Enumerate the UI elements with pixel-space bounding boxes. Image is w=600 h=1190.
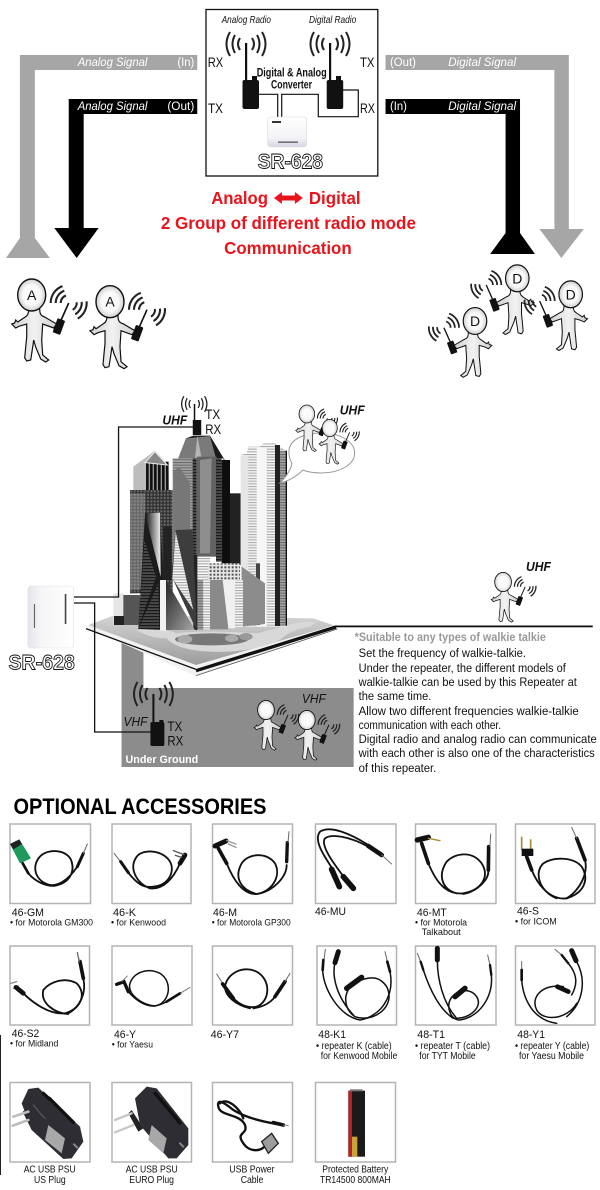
figure: UHF user on ground: UHF [526,559,552,574]
label: digital and analog converter [257,66,327,92]
labels: row 2 accessories: 48-T1 [417,1029,445,1041]
group: analog radio users: A [105,294,115,310]
labels: row 1 accessories: 46-S [517,906,539,918]
labels: row 2 accessories: • repeater K (cable) [316,1041,392,1052]
labels: row 1 accessories: 46-MU [315,906,346,918]
wires between radios and device [259,90,358,117]
label: right RX: RX [360,101,375,116]
labels: row 3 accessories: Protected Battery [322,1164,389,1176]
heading: optional accessories: OPTIONAL ACCESSORIES [14,794,266,819]
cable: 48-T1 [417,948,492,1020]
labels: row 2 accessories: • for Yaesu [112,1040,153,1050]
labels: row 2 accessories: • repeater Y (cable) [515,1041,589,1052]
arrow: gray digital signal out: (Out) [390,55,416,69]
cable: 46-Y7 [217,969,290,1008]
group: analog radio users [12,279,165,369]
heading: red communication statement: 2 Group of different radio mode [161,213,416,233]
label: digital radio: Digital Radio [309,14,356,26]
accessories row 3, adapters and battery [13,1087,365,1159]
text: feature description: walkie-talkie can be used by this Repeater at [358,675,577,689]
labels: row 3 accessories: EURO Plug [129,1174,174,1186]
labels: row 3 accessories: US Plug [34,1174,66,1186]
label: underground VHF TX RX: RX [167,733,183,749]
icon: AC USB PSU EURO plug [115,1087,188,1158]
labels: row 1 accessories: • for Motorola GP300 [212,917,291,928]
arrow: black analog signal out [54,99,197,258]
labels: row 1 accessories: 46-GM [12,907,44,919]
icon: USB power cable [218,1101,288,1153]
text: feature description: Allow two different frequencies walkie-talkie [359,704,579,718]
cable: 46-S [522,827,586,899]
arrow: gray analog signal in: (In) [177,55,194,69]
cable: 46-S2 [11,953,84,1014]
labels: row 3 accessories: USB Power [229,1164,275,1176]
labels: row 1 accessories: • for Motorola GM300 [10,917,93,928]
labels: row 1 accessories: • for Kenwood [111,917,166,928]
label: rooftop UHF TX RX [162,407,221,437]
label: SR-628: SR-628 [258,150,323,174]
text: feature description: of this repeater. [359,761,436,775]
arrow: black digital signal in: Digital Signal [448,99,516,113]
cable: 46-M [215,832,289,894]
labels: row 1 accessories: 46-MT [417,907,447,919]
icon: protected battery [348,1089,365,1157]
label: right TX: TX [360,55,374,70]
figures: underground VHF users: VHF [302,692,327,706]
labels: row 1 accessories: Talkabout [422,927,461,938]
labels: row 3 accessories: TR14500 800MAH [320,1174,391,1186]
cable: 46-MU [318,829,392,888]
labels: row 2 accessories: 46-Y [114,1029,137,1041]
icon: analog radio walkie-talkie [226,32,266,109]
icon: AC USB PSU US plug [13,1088,83,1159]
arrow: gray digital signal out [386,55,584,258]
label: digital and analog converter: Converter [271,78,312,92]
icon: digital radio walkie-talkie [310,32,350,109]
group: analog radio users: A [27,287,37,303]
text: feature description: communication with each other. [359,718,501,732]
labels: row 3 accessories: Cable [241,1174,264,1186]
labels: row 1 accessories: 46-K [113,907,137,919]
text: feature description: Under the repeater, the different models of [359,661,566,675]
labels: row 2 accessories [10,1028,589,1062]
heading: red communication statement: Digital [309,188,361,208]
label: SR-628 device name: SR-628 [8,651,75,675]
cable: 48-K1 [323,949,391,1020]
group: digital radio users: D [470,313,480,329]
callout: UHF users speech bubble [280,402,366,483]
cable: 46-GM [10,839,87,886]
text: feature description: *Suitable to any types of walkie talkie [355,630,546,644]
label: analog radio: Analog Radio [221,14,271,26]
cards: accessory frames [10,824,595,1162]
cable: 46-K [114,851,185,888]
arrow: gray digital signal out: Digital Signal [448,55,516,69]
panel: converter box [206,10,378,176]
labels: row 1 accessories [10,906,557,938]
labels: row 2 accessories: • for Midland [10,1038,58,1049]
labels: row 2 accessories: for Yaesu Mobile [519,1051,584,1062]
arrow: black digital signal in: (In) [390,99,407,113]
labels: row 2 accessories: 48-Y1 [517,1029,545,1041]
arrow: black analog signal out: Analog Signal [77,99,148,113]
text: feature description: the same time. [359,689,431,703]
heading: red communication statement: Analog [211,188,268,208]
wires from repeater to radios [74,427,193,732]
accessories row 2, left cables [11,953,290,1014]
label: rooftop UHF TX RX: UHF [162,412,188,428]
label: underground VHF TX RX: VHF [124,715,149,729]
cable: 46-MT [417,834,491,894]
labels: row 2 accessories: • repeater T (cable) [415,1041,490,1052]
group: digital radio users: D [566,286,576,302]
label: underground VHF TX RX [124,715,183,749]
labels: row 1 accessories: 46-M [213,907,237,919]
label: rooftop UHF TX RX: TX [205,407,220,422]
panel: underground area [122,640,354,767]
line: ground surface [335,626,593,627]
label: rooftop UHF TX RX: RX [205,422,221,437]
labels: row 1 accessories: • for ICOM [515,916,557,927]
accessories row 2, right cables [323,948,582,1023]
arrow: black digital signal in [386,99,535,254]
label: underground VHF TX RX: TX [167,719,182,734]
arrow: gray analog signal in [6,55,197,258]
label: left RX: RX [208,55,223,70]
figure: UHF user on ground [491,559,552,622]
label: left TX: TX [208,101,223,116]
labels: row 3 accessories [24,1164,391,1186]
icon: underground VHF radio [134,682,173,746]
labels: row 2 accessories: 48-K1 [318,1029,346,1041]
labels: row 1 accessories: • for Motorola [415,917,468,928]
text: feature description: Set the frequency of walkie-talkie. [359,646,526,660]
labels: row 3 accessories: AC USB PSU [126,1164,178,1176]
icon: SR-628 device [268,117,307,147]
group: digital radio users [429,265,588,377]
illustration: city on platform [85,436,337,676]
group: digital radio users: D [512,270,522,286]
label: under ground: Under Ground [126,754,198,766]
text: feature description [355,630,597,775]
heading: red communication statement: Communication [224,238,352,258]
icon: SR-628 device upright [28,586,74,648]
cable: 48-Y1 [522,949,582,1023]
labels: row 2 accessories: for TYT Mobile [419,1051,476,1062]
labels: row 2 accessories: for Kenwood Mobile [321,1051,398,1062]
icon: rooftop UHF radio [182,396,207,435]
accessories row 1, left cables [10,832,289,894]
labels: row 3 accessories: AC USB PSU [24,1164,76,1176]
arrow: gray analog signal in: Analog Signal [77,55,148,69]
labels: row 2 accessories: 46-S2 [12,1028,39,1040]
label: digital and analog converter: Digital & Analog [257,66,327,80]
cable: 46-Y [117,971,190,1006]
labels: row 2 accessories: 46-Y7 [211,1029,239,1041]
callout: UHF users speech bubble: UHF [340,402,366,418]
arrow: black analog signal out: (Out) [167,99,194,113]
heading: red communication statement [161,188,416,258]
accessories row 1, right cables [318,827,586,899]
figures: underground VHF users [254,692,340,760]
